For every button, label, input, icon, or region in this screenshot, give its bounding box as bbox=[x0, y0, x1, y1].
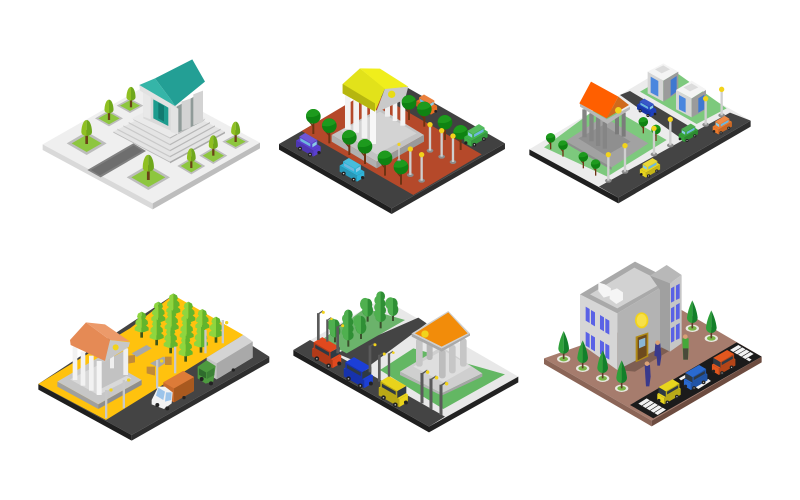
scene: orange roof bank with towers bbox=[529, 63, 751, 203]
scene: white bank with teal roof bbox=[43, 59, 260, 209]
car: orange bbox=[712, 350, 735, 375]
grey platform bbox=[529, 70, 751, 203]
lawn: bank surround bbox=[380, 348, 505, 409]
car: blue bbox=[637, 99, 656, 117]
lawn: left bbox=[544, 103, 667, 177]
stepped plinth bbox=[113, 100, 225, 163]
car: yellow bbox=[379, 376, 408, 407]
bank building bbox=[57, 322, 142, 409]
scene: grey office bank on brown plaza bbox=[544, 262, 762, 426]
yellow ground bbox=[38, 295, 243, 420]
truck: grey with green cab bbox=[198, 335, 253, 385]
road with crossings bbox=[630, 342, 762, 418]
car: purple bbox=[296, 133, 321, 157]
bank building bbox=[412, 311, 470, 378]
car: orange bbox=[416, 95, 437, 115]
white platform bbox=[43, 83, 260, 209]
car: orange bbox=[713, 116, 732, 134]
car: green bbox=[679, 124, 698, 142]
front lamp posts bbox=[105, 378, 130, 418]
platform bbox=[293, 298, 518, 432]
tall tree cluster bbox=[327, 291, 398, 347]
car: yellow bbox=[657, 379, 681, 404]
car: blue bbox=[684, 365, 707, 390]
office towers bbox=[648, 63, 706, 117]
lamp posts bbox=[397, 122, 456, 183]
scene: yellow ground bank with trucks bbox=[38, 293, 269, 441]
car: blue bbox=[344, 357, 373, 388]
truck: orange with white cab bbox=[152, 371, 194, 410]
car: green bbox=[464, 124, 488, 147]
ground shadow bbox=[617, 343, 682, 372]
trees bbox=[81, 87, 240, 180]
scene: orange roof bank with three cars bbox=[293, 291, 518, 432]
roadside trees bbox=[557, 300, 718, 392]
columns and roof of bank bbox=[343, 68, 408, 144]
park benches bbox=[128, 345, 172, 376]
dark road platform bbox=[279, 79, 505, 214]
round shrubs bbox=[546, 117, 661, 176]
stepped plinth bbox=[566, 117, 648, 170]
bank building bbox=[579, 82, 630, 149]
car: red bbox=[312, 337, 341, 368]
road bbox=[599, 91, 751, 198]
lawn: tree garden bbox=[322, 308, 405, 353]
brick plaza bbox=[302, 90, 482, 195]
car: cyan bbox=[340, 158, 364, 182]
planting beds bbox=[67, 98, 249, 190]
stepped plinth bbox=[400, 347, 482, 396]
scene: brick plaza bank with yellow roof bbox=[279, 68, 505, 214]
platform and road bbox=[38, 295, 269, 441]
round trees bbox=[306, 95, 468, 185]
conifer grove bbox=[135, 293, 223, 362]
road bbox=[293, 340, 445, 427]
side road bbox=[337, 318, 427, 367]
bank building bbox=[139, 59, 205, 135]
stepped plinth bbox=[332, 108, 424, 168]
lamp poles bbox=[156, 320, 228, 388]
brown platform bbox=[544, 310, 762, 426]
car: yellow bbox=[640, 158, 660, 178]
office building bbox=[580, 262, 682, 370]
entry path bbox=[87, 143, 146, 177]
lamp posts bbox=[605, 87, 725, 183]
pedestrians bbox=[645, 334, 689, 386]
street lamps bbox=[317, 310, 448, 415]
lawn: towers bbox=[640, 72, 727, 124]
